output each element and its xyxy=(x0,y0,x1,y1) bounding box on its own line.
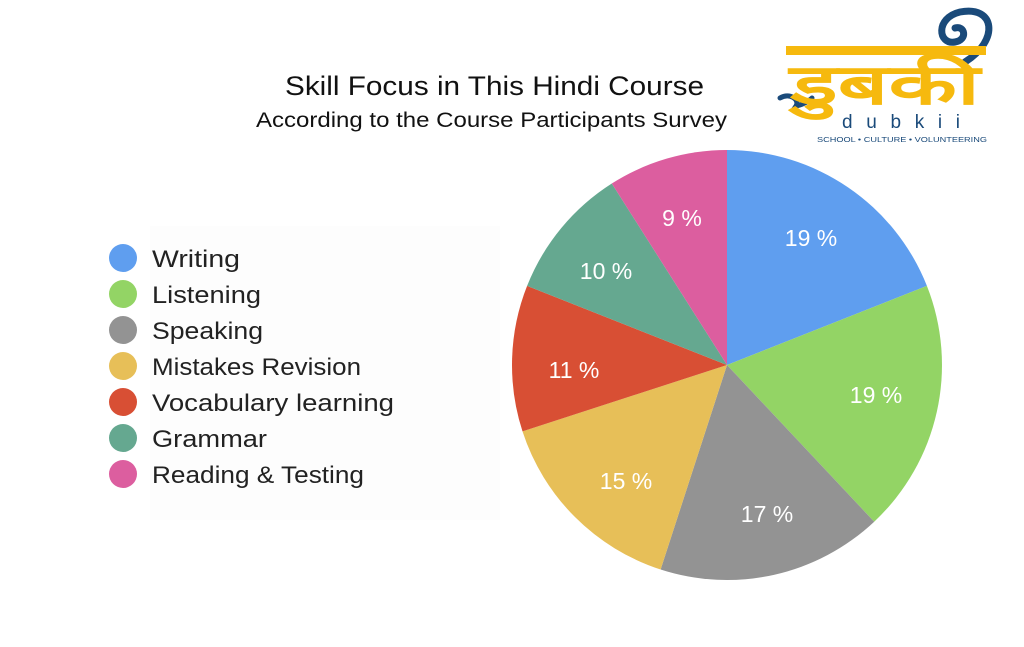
title xyxy=(256,71,728,132)
legend: Writing xyxy=(152,246,240,273)
title: Skill Focus in This Hindi Course xyxy=(285,71,704,101)
legend: Reading & Testing xyxy=(152,462,364,489)
legend: Mistakes Revision xyxy=(152,354,361,381)
legend xyxy=(109,226,500,520)
slice labels: 19 % xyxy=(850,382,902,408)
legend: Grammar xyxy=(152,426,267,453)
logo: dubkii xyxy=(780,11,989,144)
logo: dubkii: dubkii xyxy=(842,112,960,133)
slice labels xyxy=(549,205,902,527)
slice labels: 15 % xyxy=(600,468,652,494)
subtitle: According to the Course Participants Survey xyxy=(256,109,728,132)
slice labels: 17 % xyxy=(741,501,793,527)
slice labels: 9 % xyxy=(662,205,702,231)
slice labels: 11 % xyxy=(549,357,599,383)
logo: dubkii: डुबकी xyxy=(787,40,984,121)
pie chart xyxy=(512,150,942,580)
legend: Speaking xyxy=(152,318,263,345)
legend: Listening xyxy=(152,282,261,309)
logo: dubkii: SCHOOL • CULTURE • VOLUNTEERING xyxy=(817,137,987,144)
slice labels: 10 % xyxy=(580,258,632,284)
slice labels: 19 % xyxy=(785,225,837,251)
legend: Vocabulary learning xyxy=(152,390,394,417)
